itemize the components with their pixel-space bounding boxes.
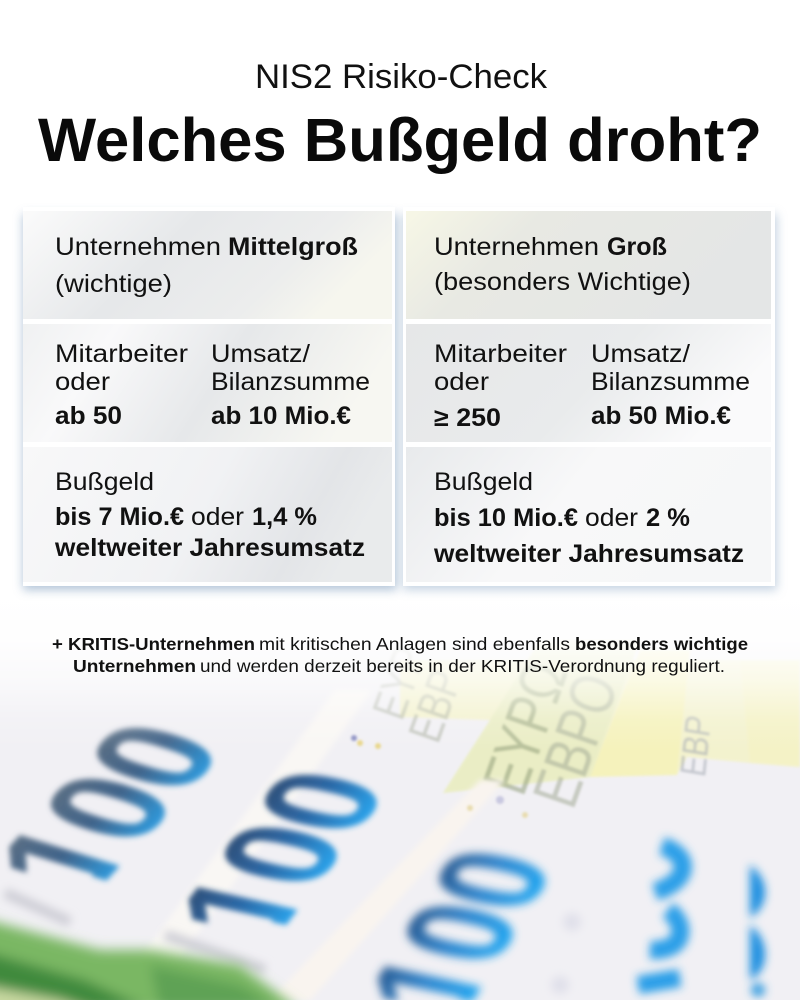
row: Mitarbeiter und Umsatz: Bilanzsumme [591,368,750,396]
row: Mitarbeiter und Umsatz: Umsatz/ [591,340,690,368]
row: Mitarbeiter und Umsatz: ab 50 [55,402,122,430]
row: Mitarbeiter und Umsatz: ab 10 Mio.€ [211,402,351,430]
footnote: KRITIS: und werden derzeit bereits in der KRITIS-Verordnung reguliert. [200,656,725,676]
faded note lettering: EBPO [519,665,632,815]
row: Mitarbeiter und Umsatz [406,324,771,442]
row: Bußgeld: oder [585,504,638,532]
row: Bußgeld: bis 7 Mio.€ [55,503,184,531]
row: Bußgeld: 1,4 % [252,503,317,531]
row: Bußgeld: Bußgeld [55,468,154,496]
row: Unternehmen Mittelgroß heading: Mittelgroß [228,233,358,261]
row: Bußgeld: weltweiter Jahresumsatz [433,540,744,568]
white fade into page [0,590,800,750]
footnote: KRITIS: mit kritischen Anlagen sind ebenfalls [259,634,570,654]
row: Mitarbeiter und Umsatz: oder [55,368,110,396]
faded note lettering: EBP [674,713,720,779]
footnote: KRITIS: + KRITIS-Unternehmen [52,634,255,654]
row: Bußgeld: 2 % [646,504,690,532]
footnote: KRITIS [52,634,748,676]
panel: Unternehmen Groß [403,207,777,590]
faded note lettering: EYP [362,640,436,725]
row: Bußgeld: Bußgeld [434,468,533,496]
footnote: KRITIS: Unternehmen [73,656,196,676]
background photo: blurred euro banknotes [0,648,800,1000]
faded note lettering: EBP [398,663,472,748]
row: Unternehmen Groß heading: Unternehmen [434,233,599,261]
row: Mitarbeiter und Umsatz: Mitarbeiter [434,340,567,368]
second number 100: 100 [140,757,422,952]
row: Unternehmen Mittelgroß heading [23,211,392,319]
row: Mitarbeiter und Umsatz: Umsatz/ [211,340,310,368]
row: Bußgeld: weltweiter Jahresumsatz [54,534,365,562]
row: Bußgeld [406,447,771,582]
row: Unternehmen Groß heading: (besonders Wichtige) [434,268,691,296]
footnote: KRITIS: besonders wichtige [575,634,748,654]
row: Mitarbeiter und Umsatz: ab 50 Mio.€ [591,402,731,430]
row: Mitarbeiter und Umsatz: Bilanzsumme [211,368,370,396]
note edge highlights [110,690,505,1000]
row: Mitarbeiter und Umsatz: oder [434,368,489,396]
green strip bottom-left [0,918,300,1000]
row: Bußgeld [23,447,392,582]
panel: Unternehmen Mittelgroß [23,207,397,590]
row: Unternehmen Groß heading [406,211,771,319]
small note dots [351,735,528,818]
row: Bußgeld: bis 10 Mio.€ [434,504,578,532]
partial blue digits right [638,846,765,997]
row: Unternehmen Mittelgroß heading: (wichtige) [55,270,172,298]
row: Bußgeld: oder [191,503,244,531]
row: Unternehmen Groß heading: Groß [607,233,667,261]
faint note microprint [5,893,581,994]
row: Mitarbeiter und Umsatz: Mitarbeiter [55,340,188,368]
yellow note area [400,640,800,793]
row: Mitarbeiter und Umsatz [23,324,392,442]
subtitle: NIS2 Risiko-Check [255,58,548,96]
faded note lettering [362,640,720,815]
row: Unternehmen Mittelgroß heading: Unternehmen [55,233,221,261]
row: Mitarbeiter und Umsatz: ≥ 250 [434,404,501,432]
faded note lettering: EYPΩ [469,653,581,802]
title: Welches Bußgeld droht? [38,106,762,174]
